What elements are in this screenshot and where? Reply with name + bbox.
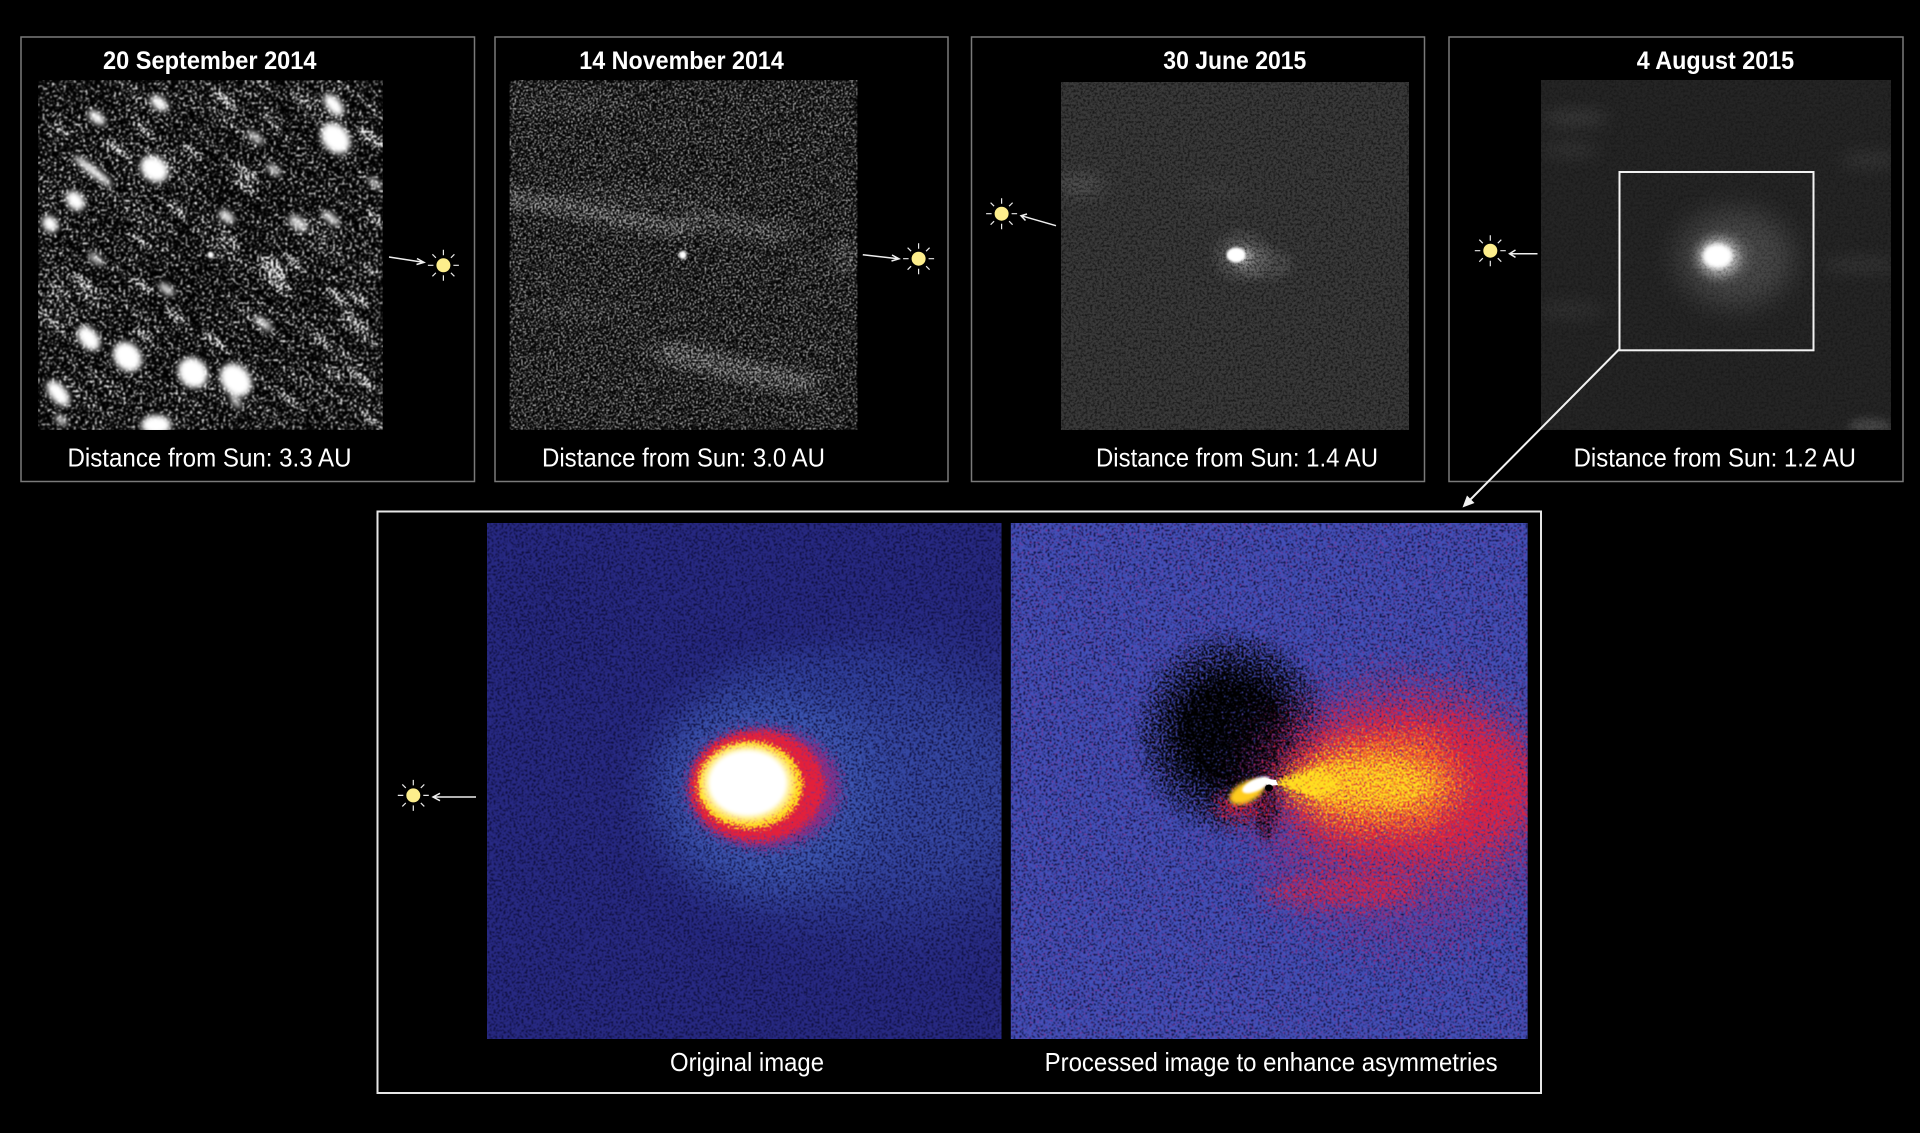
zoom box xyxy=(1620,172,1814,350)
image: comet with wider coma xyxy=(1534,80,1900,434)
comet saturated core xyxy=(708,750,787,816)
sun icon and arrow xyxy=(1475,235,1538,266)
caption: processed image: Processed image to enhance asymmetries xyxy=(1045,1047,1498,1077)
dark asymmetry blob xyxy=(1129,625,1337,843)
heading: 4 August 2015: 4 August 2015 xyxy=(1637,47,1794,75)
image: star field with streaks xyxy=(38,80,383,430)
red wing xyxy=(1212,685,1550,911)
purple speckle xyxy=(1011,523,1528,1039)
caption: original image: Original image xyxy=(670,1047,824,1077)
dark speckle xyxy=(1011,523,1528,1039)
distance label: Distance from Sun: 1.4 AU xyxy=(1096,443,1378,473)
sun icon and arrow xyxy=(986,198,1056,229)
distance label: Distance from Sun: 3.0 AU xyxy=(542,443,825,473)
sun icon and arrow xyxy=(398,780,476,811)
image: processed comet false colour xyxy=(1011,523,1565,1039)
panel: enlarged comet views xyxy=(378,512,1565,1093)
distance label: Distance from Sun: 3.3 AU xyxy=(68,443,352,473)
heading: 30 June 2015: 30 June 2015 xyxy=(1163,47,1306,75)
arrow: zoom box to enlarged panel xyxy=(1462,349,1620,508)
jet: nucleus and left bright wedge xyxy=(1226,773,1278,810)
image: original comet false colour xyxy=(487,523,1002,1039)
coma rings xyxy=(686,726,842,850)
comet point xyxy=(679,251,687,259)
sun icon and arrow xyxy=(389,250,459,281)
yellow jet xyxy=(1272,743,1455,827)
panel: 4 August 2015 xyxy=(1449,37,1903,482)
purple wing xyxy=(1235,665,1565,965)
comet nucleus xyxy=(1226,248,1246,262)
panel: 30 June 2015 xyxy=(972,37,1424,482)
heading: 14 November 2014: 14 November 2014 xyxy=(579,47,784,75)
image: comet with small coma xyxy=(1054,82,1409,430)
heading: 20 September 2014: 20 September 2014 xyxy=(103,47,317,75)
panel: 14 November 2014 xyxy=(495,37,948,482)
image: faint streaks and comet point xyxy=(508,80,858,430)
comet nucleus xyxy=(1702,244,1732,268)
orange jet xyxy=(1275,728,1475,835)
panel: 20 September 2014 xyxy=(20,36,476,482)
dark speckle on the sky xyxy=(487,523,1002,1039)
distance label: Distance from Sun: 1.2 AU xyxy=(1574,443,1856,473)
sun icon and arrow xyxy=(863,243,934,274)
comet point xyxy=(208,252,214,258)
bright stars xyxy=(39,91,383,435)
